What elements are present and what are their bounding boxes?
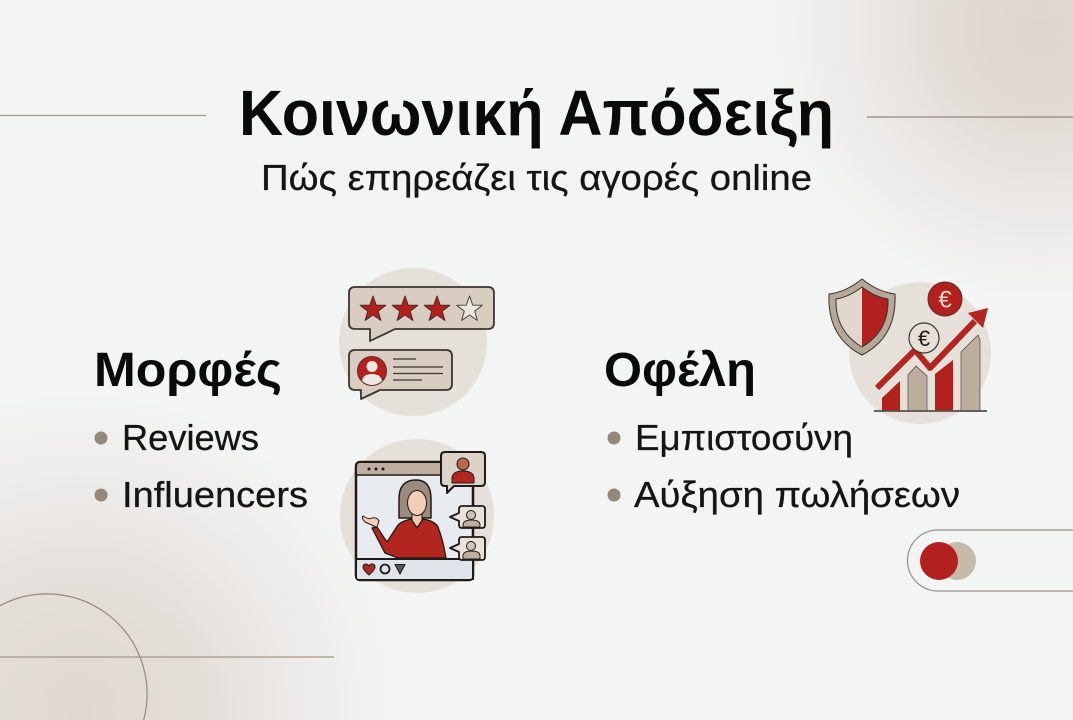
heading: benefits: Οφέλη (604, 344, 756, 397)
connector (472, 486, 474, 580)
arrow head (968, 308, 988, 328)
list item: sales growth: Αύξηση πωλήσεων (634, 474, 960, 515)
browser window (356, 462, 473, 580)
chart bars (874, 335, 987, 411)
toggle decoration (907, 530, 1073, 591)
euro coin: red: € (938, 286, 952, 314)
heading: forms: Μορφές (94, 344, 282, 397)
euro coin: red (928, 282, 962, 316)
icon: influencer video window (340, 439, 494, 593)
growth arrow (877, 321, 975, 388)
list item: influencers: Influencers (122, 474, 308, 515)
review bubble (349, 350, 452, 399)
euro coin: light: € (918, 326, 930, 351)
icon: shield, coins and growth chart (829, 279, 991, 424)
lower follower bubble (450, 537, 485, 560)
list item: trust: Εμπιστοσύνη (635, 417, 853, 458)
rating bubble (349, 287, 494, 341)
top follower bubble (441, 452, 485, 493)
panel: forms (94, 344, 308, 515)
icon: rating and review bubbles (339, 268, 494, 416)
panel: benefits (604, 344, 960, 515)
middle follower bubble (450, 506, 485, 528)
list item: reviews: Reviews (122, 417, 259, 458)
social icons (363, 564, 405, 575)
presenter (362, 480, 446, 558)
title: Κοινωνική Απόδειξη (239, 77, 834, 149)
shield (829, 279, 895, 355)
subtitle: Πώς επηρεάζει τις αγορές online (261, 157, 812, 198)
euro coin: light (909, 323, 939, 353)
